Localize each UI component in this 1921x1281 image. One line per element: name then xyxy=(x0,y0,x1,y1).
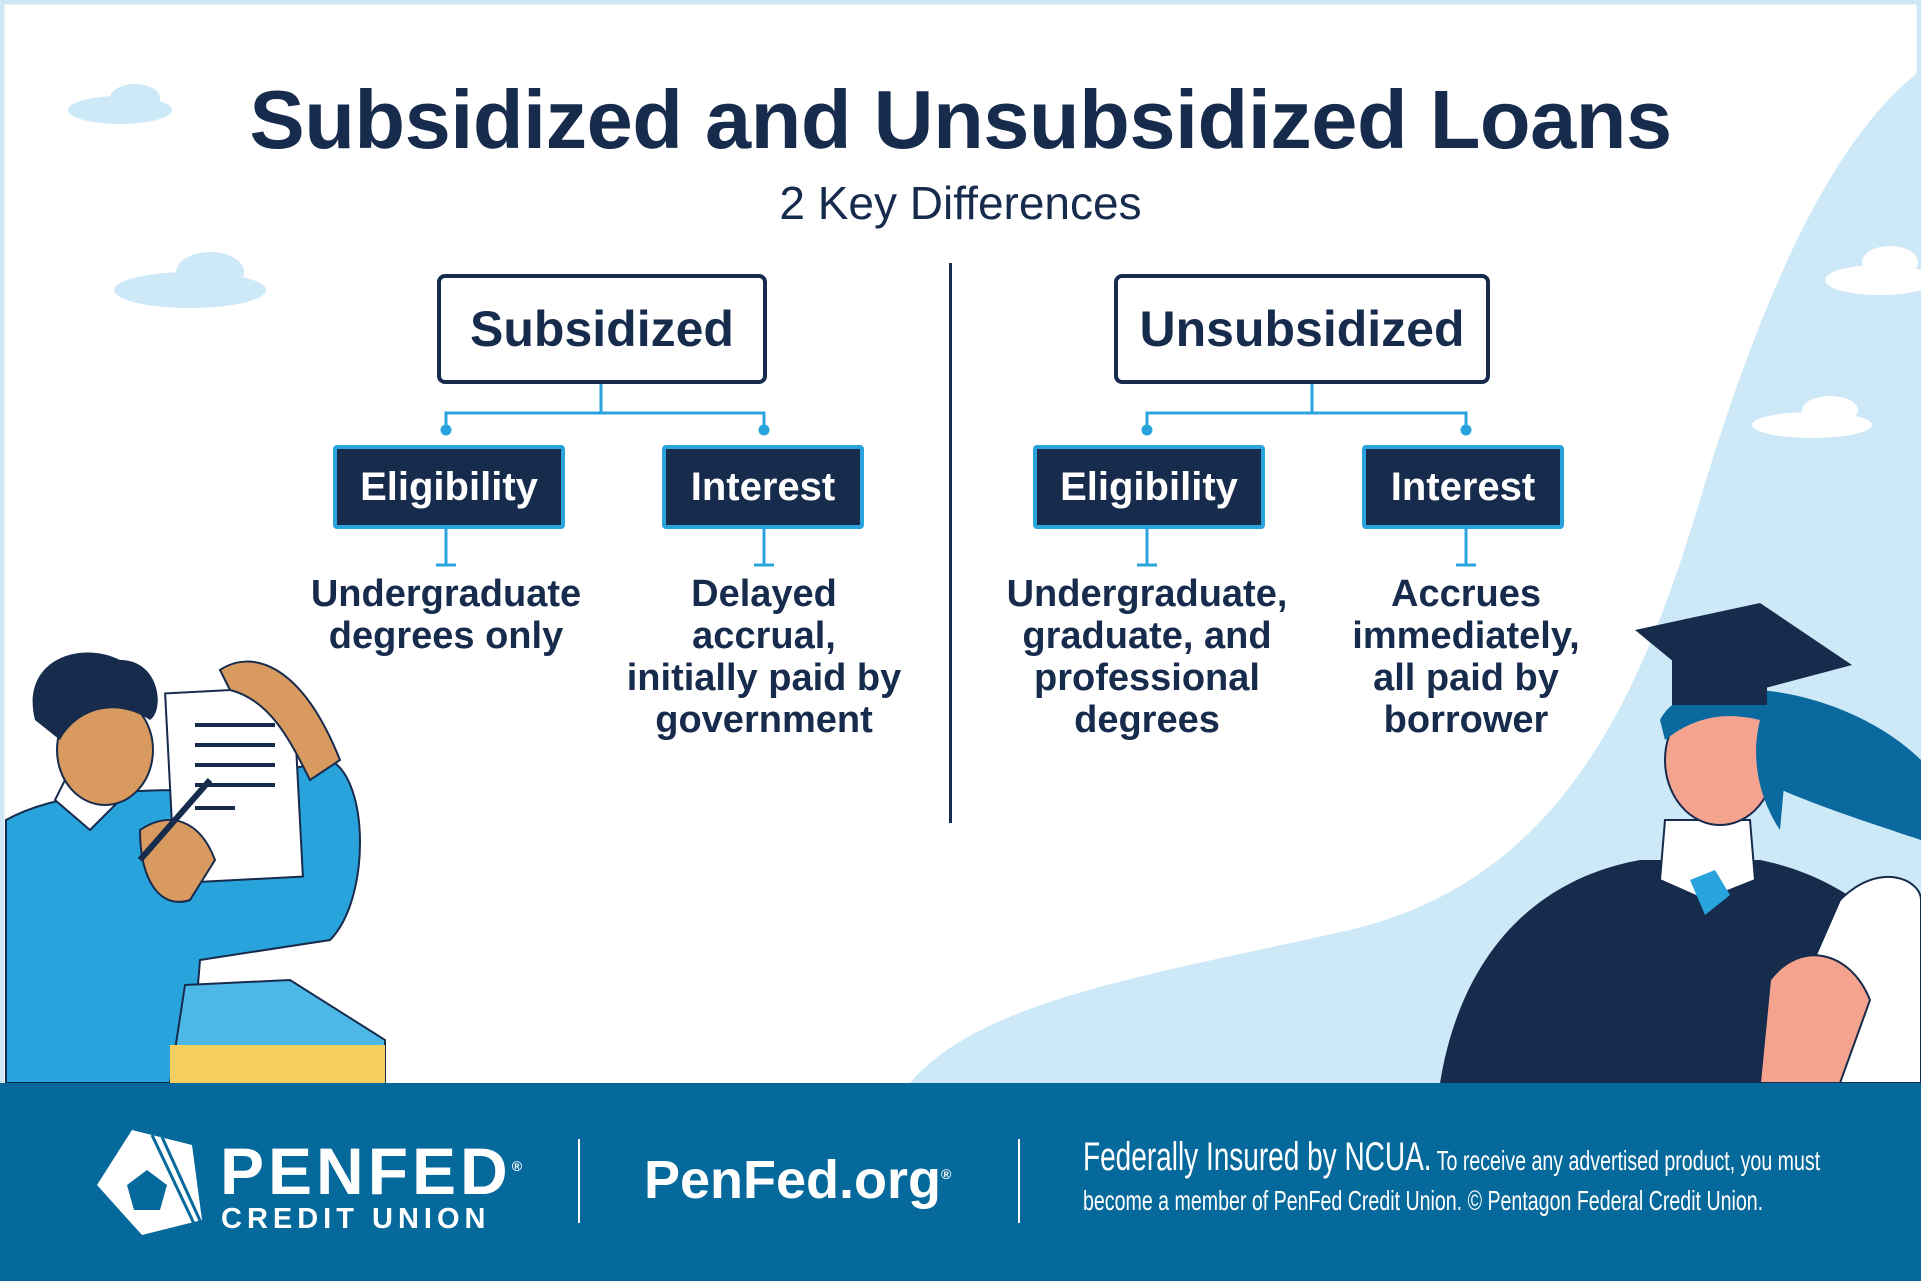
label: eligibility: Eligibility xyxy=(1060,464,1238,508)
connectors xyxy=(436,384,1476,566)
text: eligibility: degrees only xyxy=(329,615,563,657)
footer xyxy=(0,1083,1921,1281)
text: interest: Delayed xyxy=(691,573,837,615)
text: interest: all paid by xyxy=(1373,657,1559,699)
light blue wave xyxy=(910,70,1921,1083)
subtitle: 2 Key Differences xyxy=(779,177,1142,229)
text: interest: immediately, xyxy=(1352,615,1580,657)
clouds right xyxy=(1752,246,1921,438)
text: interest: initially paid by xyxy=(627,657,901,699)
heading: Unsubsidized xyxy=(1114,274,1490,384)
icon: penfed logo xyxy=(97,1130,202,1235)
right person xyxy=(1440,603,1921,1083)
text: eligibility: Undergraduate, xyxy=(1007,573,1287,615)
text: eligibility: degrees xyxy=(1074,699,1220,741)
text: interest xyxy=(1352,573,1580,741)
disclaimer xyxy=(1083,1135,1820,1216)
text: interest xyxy=(627,573,901,741)
disclaimer: become a member of PenFed Credit Union. © Pentagon Federal Credit Union. xyxy=(1083,1185,1763,1216)
text: interest: government xyxy=(655,699,873,741)
website: PenFed.org® xyxy=(644,1150,951,1210)
disclaimer: Federally Insured by NCUA. To receive any advertised product, you must xyxy=(1083,1135,1820,1179)
footer: CREDIT UNION xyxy=(221,1203,490,1235)
label: interest xyxy=(662,445,864,529)
heading: Subsidized xyxy=(437,274,767,384)
text: interest: borrower xyxy=(1384,699,1548,741)
text: interest: Accrues xyxy=(1391,573,1541,615)
label: interest: Interest xyxy=(691,464,835,508)
heading: Subsidized: Subsidized xyxy=(470,301,734,357)
divider xyxy=(949,263,952,823)
text: eligibility: graduate, and xyxy=(1022,615,1272,657)
label: eligibility xyxy=(1033,445,1265,529)
left person xyxy=(6,652,385,1083)
cloud left 2 xyxy=(114,252,266,308)
panel: subsidized xyxy=(311,274,901,741)
text: eligibility xyxy=(311,573,581,657)
text: interest: accrual, xyxy=(692,615,836,657)
logo text: PENFED® xyxy=(220,1134,526,1208)
heading: Unsubsidized: Unsubsidized xyxy=(1139,301,1465,357)
label: interest xyxy=(1362,445,1564,529)
text: eligibility: professional xyxy=(1034,657,1260,699)
panel: unsubsidized xyxy=(1007,274,1580,741)
cloud left 1 xyxy=(68,84,172,124)
title: Subsidized and Unsubsidized Loans xyxy=(249,73,1672,166)
label: interest: Interest xyxy=(1391,464,1535,508)
text: eligibility xyxy=(1007,573,1287,741)
label: eligibility: Eligibility xyxy=(360,464,538,508)
text: eligibility: Undergraduate xyxy=(311,573,581,615)
label: eligibility xyxy=(333,445,565,529)
